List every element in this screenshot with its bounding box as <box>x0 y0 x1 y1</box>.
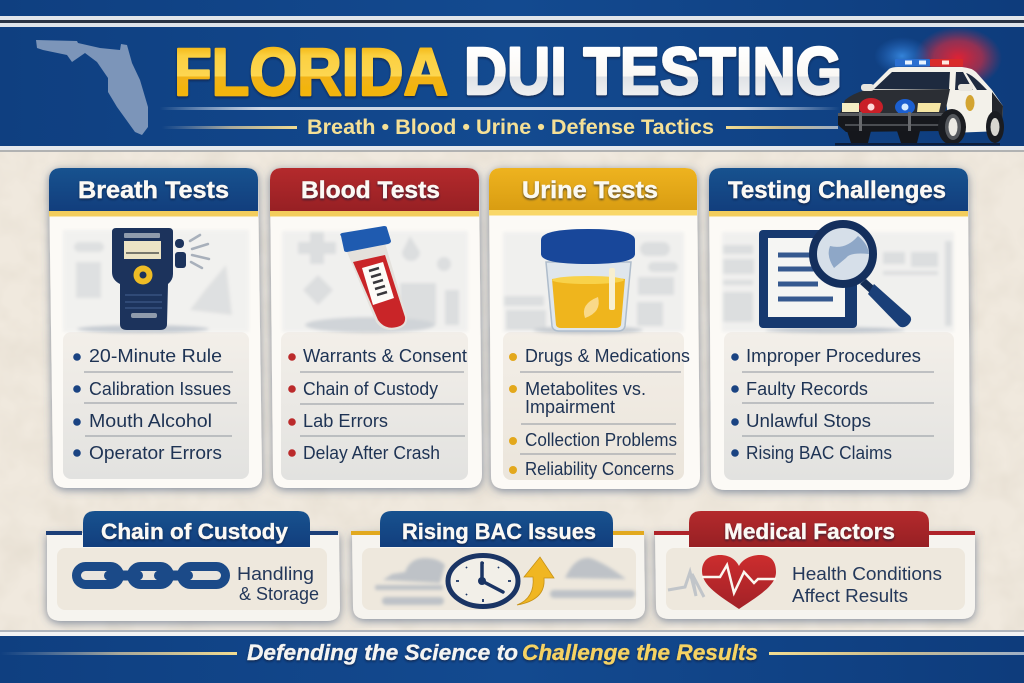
tab heading: Rising BAC Issues <box>402 519 596 544</box>
icon: chain links <box>76 566 226 584</box>
ghost background art <box>63 230 249 333</box>
bullet list: Warrants & Consent <box>303 345 467 366</box>
panel text <box>792 563 942 606</box>
ghost background art <box>375 558 635 605</box>
title: FLORIDA <box>174 35 448 110</box>
panel header <box>489 168 697 210</box>
panel: Chain of Custody <box>46 511 340 621</box>
title <box>174 34 842 110</box>
tab heading: Chain of Custody <box>101 519 289 544</box>
header accent strip <box>489 210 697 216</box>
ghost background art <box>503 232 684 334</box>
panel header <box>709 168 968 211</box>
footer tagline: Defending the Science to <box>247 640 518 665</box>
footer tagline <box>247 640 758 665</box>
list background <box>281 332 468 480</box>
bullet list: Chain of Custody <box>303 378 439 399</box>
heading: Urine Tests <box>522 177 658 204</box>
header accent strip <box>709 211 968 216</box>
panel: Blood Tests <box>270 168 482 488</box>
bullet list: Delay After Crash <box>303 442 440 463</box>
tab heading <box>380 511 613 547</box>
panel text: & Storage <box>239 583 319 604</box>
header accent strip <box>270 211 479 216</box>
ghost background art <box>282 231 468 333</box>
title: DUI TESTING <box>464 34 842 109</box>
panel header <box>270 168 479 211</box>
panel text <box>237 563 319 604</box>
bullet list: Reliability Concerns <box>525 458 674 479</box>
footer tagline: Challenge the Results <box>522 640 758 665</box>
icon: heart with pulse <box>702 555 776 609</box>
subtitle rule left <box>162 126 297 129</box>
bullet list <box>509 345 690 479</box>
panel: Testing Challenges <box>709 168 970 490</box>
footer rule right <box>769 652 1024 655</box>
bullet list: Drugs & Medications <box>525 345 690 366</box>
panel: Rising BAC Issues <box>351 511 645 619</box>
bullet list: Mouth Alcohol <box>89 410 212 431</box>
icon: document and magnifier <box>759 224 911 328</box>
windshield <box>874 72 950 89</box>
list background <box>724 332 954 480</box>
tab heading <box>83 511 310 547</box>
icon: clock <box>448 556 518 606</box>
panel header <box>49 168 258 211</box>
bullet list: Faulty Records <box>746 378 868 399</box>
panel text: Affect Results <box>792 585 908 606</box>
bullet list: Rising BAC Claims <box>746 442 892 463</box>
list background <box>503 332 684 480</box>
heading: Breath Tests <box>78 177 229 204</box>
bullet list: Lab Errors <box>303 410 388 431</box>
icon: Florida map <box>36 40 148 135</box>
footer banner <box>0 630 1024 683</box>
panel text: Handling <box>237 563 314 584</box>
bullet list <box>73 345 237 463</box>
side windows <box>955 72 987 90</box>
icon: blood vial <box>340 226 407 330</box>
tab heading: Medical Factors <box>724 519 895 544</box>
bullet list: Calibration Issues <box>89 378 231 399</box>
bullet list <box>731 345 934 463</box>
bullet list: Collection Problems <box>525 429 677 450</box>
icon: rising arrow <box>517 557 554 605</box>
subtitle: Breath • Blood • Urine • Defense Tactics <box>307 116 714 139</box>
panel: Medical Factors <box>654 511 975 619</box>
bullet list: Unlawful Stops <box>746 410 871 431</box>
header accent strip <box>49 211 258 216</box>
bullet list: Operator Errors <box>89 442 222 463</box>
footer rule left <box>0 652 237 655</box>
panel: Breath Tests <box>49 168 262 488</box>
icon: police car <box>835 27 1004 146</box>
panel: Urine Tests <box>489 168 700 489</box>
rear dark panel <box>992 92 1003 132</box>
panel text: Health Conditions <box>792 563 942 584</box>
subtitle rule right <box>726 126 838 129</box>
heading: Blood Tests <box>301 177 440 204</box>
bullet list: Impairment <box>525 396 615 417</box>
bullet list: Improper Procedures <box>746 345 921 366</box>
rule above subtitle <box>160 107 840 110</box>
bullet list: 20-Minute Rule <box>89 345 222 366</box>
car side and roof, white <box>868 67 1003 133</box>
heading: Testing Challenges <box>728 177 946 204</box>
list background <box>63 332 249 479</box>
ghost background art <box>722 232 954 333</box>
tab heading <box>689 511 929 547</box>
bullet list <box>288 345 467 463</box>
bullet list: Metabolites vs. <box>525 378 646 399</box>
icon: breathalyzer <box>112 228 209 330</box>
icon: urine cup <box>541 229 635 331</box>
ghost background art <box>668 572 704 597</box>
hood <box>840 89 950 113</box>
header banner <box>0 0 1024 152</box>
